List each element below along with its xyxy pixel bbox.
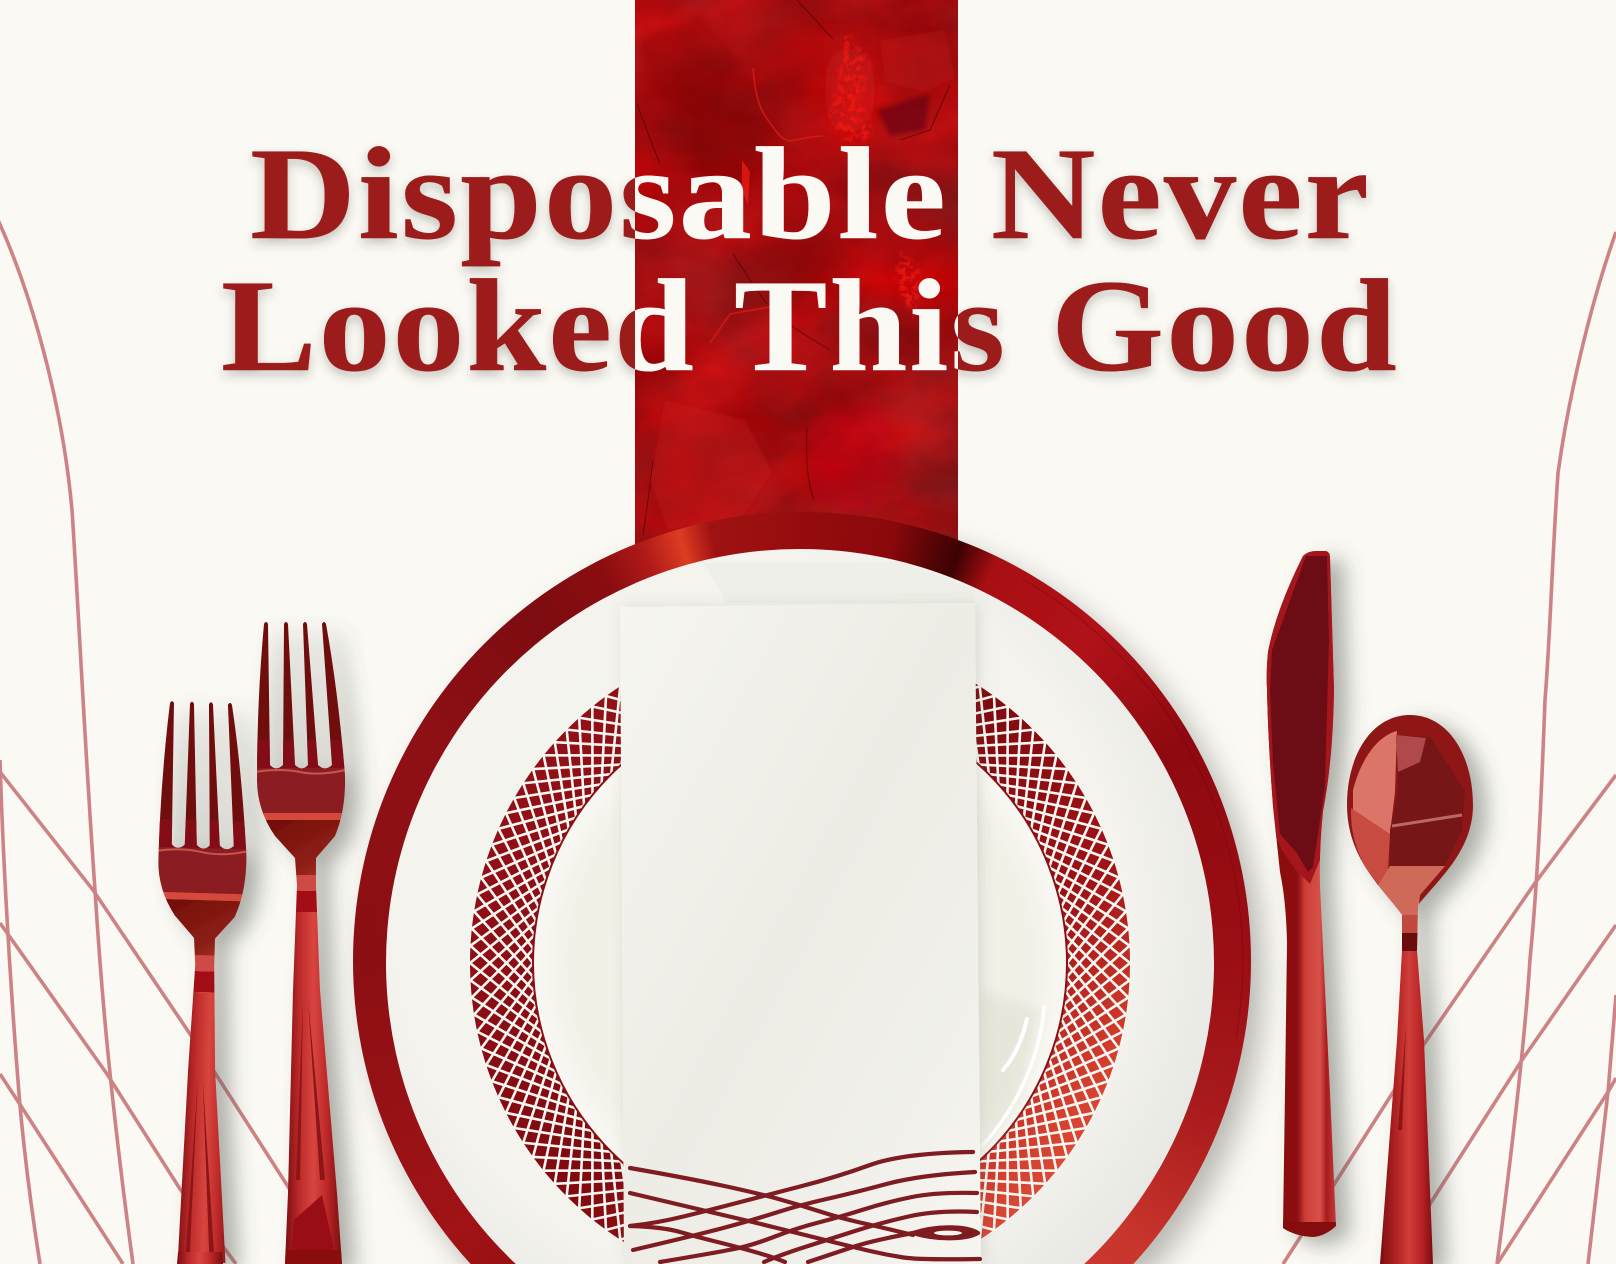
title text on cream background: Disposable — [250, 120, 948, 267]
title text on marble band: Looked — [221, 252, 696, 399]
bright flare — [742, 160, 750, 205]
panel: red marble band — [635, 0, 958, 544]
napkin wave print — [630, 1152, 980, 1262]
dinner fork handle end — [285, 1178, 367, 1264]
title text on marble band — [635, 146, 958, 372]
title text on cream background: Never — [991, 120, 1371, 267]
title text on cream background: This — [734, 252, 1007, 399]
lattice ring — [399, 574, 1201, 1264]
icon: salad fork — [139, 694, 256, 1264]
cutlery — [158, 548, 1498, 1264]
white charger plate — [386, 549, 1214, 1264]
marble facets — [640, 15, 955, 530]
marble speckles — [828, 30, 920, 310]
marble bright cracks — [710, 68, 823, 343]
title text on cream background — [220, 146, 1398, 382]
napkin — [620, 603, 981, 1264]
title text on cream background: Good — [1051, 252, 1399, 399]
icon: spoon — [1340, 710, 1480, 1264]
title text on marble band: Good — [1051, 252, 1399, 399]
plate: charger, salad plate and napkin — [349, 512, 1279, 1264]
title text on marble band: Never — [991, 120, 1371, 267]
napkin fold — [704, 562, 975, 603]
title text on marble band: This — [734, 252, 1007, 399]
plate well — [533, 696, 1067, 1230]
icon: knife — [1260, 545, 1340, 1245]
marble veins — [637, 0, 950, 535]
stacked plate edge — [1022, 579, 1243, 1038]
title — [220, 146, 1398, 382]
plate well shading — [980, 990, 1040, 1150]
plate rim — [349, 512, 1279, 1264]
salad fork handle end — [177, 1252, 223, 1264]
title text on marble band: Disposable — [250, 120, 948, 267]
title text on cream background: Looked — [221, 252, 696, 399]
icon: dinner fork — [250, 615, 350, 1264]
plate highlight — [982, 1007, 1044, 1146]
